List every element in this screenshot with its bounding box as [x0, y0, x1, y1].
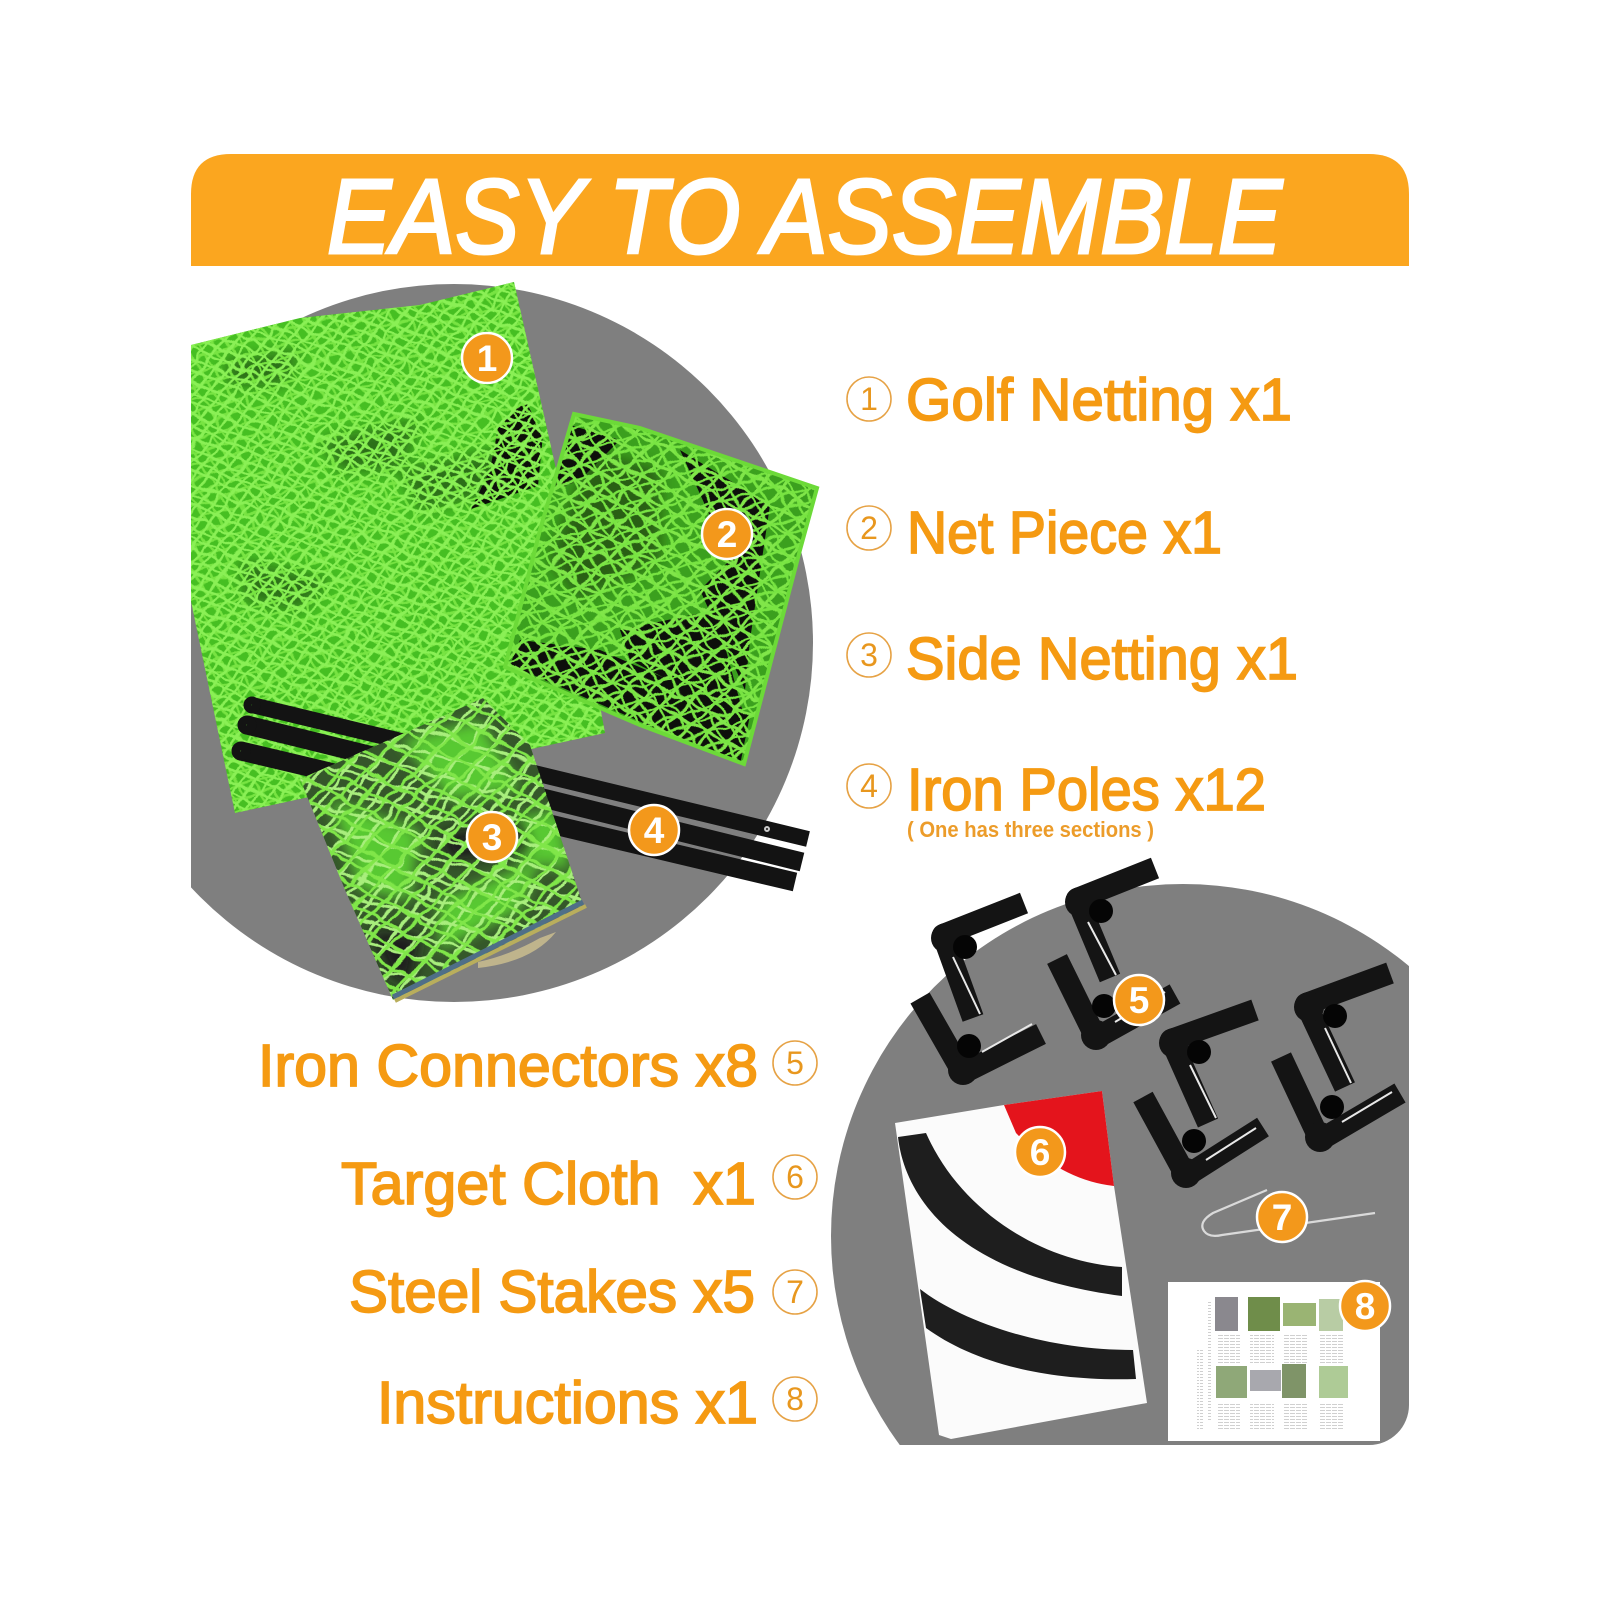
- item 5: Iron Connectors x8: [258, 1033, 758, 1099]
- panel: side netting photo: [290, 690, 590, 1010]
- badges on photos: 5: [1129, 980, 1149, 1021]
- item 2: Net Piece x1: [907, 500, 1222, 566]
- photos bottom row: [1216, 1364, 1348, 1398]
- item 7: 7: [786, 1274, 804, 1310]
- parts list: items 5 to 8: [258, 1033, 817, 1436]
- item 4: [847, 757, 1266, 842]
- item 1: 1: [860, 381, 878, 417]
- icon: iron connector pair 2: [1057, 868, 1175, 1050]
- icon: iron connector pair 4: [1281, 973, 1400, 1152]
- item 2: 2: [860, 510, 878, 546]
- panel: instructions sheet: [1168, 1282, 1380, 1441]
- item 4: 4: [860, 768, 878, 804]
- zipper edge: [393, 902, 583, 997]
- item 4: ( One has three sections ): [907, 817, 1154, 842]
- item 3: 3: [860, 637, 878, 673]
- icon: iron connector pair 1: [920, 903, 1041, 1085]
- item 8: 8: [786, 1381, 804, 1417]
- item 8: Instructions x1: [377, 1370, 758, 1436]
- item 4: Iron Poles x12: [907, 757, 1266, 823]
- icon: steel stake: [1202, 1190, 1375, 1236]
- badges on photos: 6: [1030, 1132, 1050, 1173]
- item 6: Target Cloth x1: [341, 1151, 756, 1217]
- instruction small print: [1197, 1302, 1344, 1430]
- badges on photos: 4: [644, 810, 665, 851]
- grey circle backdrop: top parts: [191, 284, 813, 1002]
- panel: golf netting photo: [191, 282, 605, 813]
- heading: easy to assemble: EASY TO ASSEMBLE: [327, 158, 1283, 276]
- grey circle backdrop: bottom parts: [831, 884, 1409, 1445]
- iron poles: [236, 701, 808, 882]
- parts list: items 1 to 4: [847, 367, 1298, 842]
- black ring 2: [920, 1289, 1136, 1379]
- badges on photos: [462, 333, 1390, 1331]
- panel: target cloth: [895, 1091, 1147, 1439]
- badges on photos: 2: [717, 514, 737, 555]
- item 3: Side Netting x1: [906, 626, 1298, 692]
- black ring 1: [898, 1133, 1122, 1296]
- badges on photos: 3: [482, 817, 502, 858]
- item 6: 6: [786, 1159, 804, 1195]
- title banner: [191, 154, 1409, 276]
- red target centre: [1004, 1091, 1114, 1186]
- icon: iron connector pair 3: [1143, 1010, 1263, 1188]
- panel: net piece photo: [502, 412, 820, 767]
- tan pouch crescent: [478, 932, 556, 968]
- badges on photos: 8: [1355, 1286, 1375, 1327]
- photos top row: [1215, 1297, 1343, 1331]
- item 1: Golf Netting x1: [906, 367, 1292, 433]
- item 5: 5: [786, 1045, 804, 1081]
- badges on photos: 7: [1272, 1197, 1292, 1238]
- badges on photos: 1: [477, 338, 497, 379]
- item 7: Steel Stakes x5: [349, 1259, 755, 1325]
